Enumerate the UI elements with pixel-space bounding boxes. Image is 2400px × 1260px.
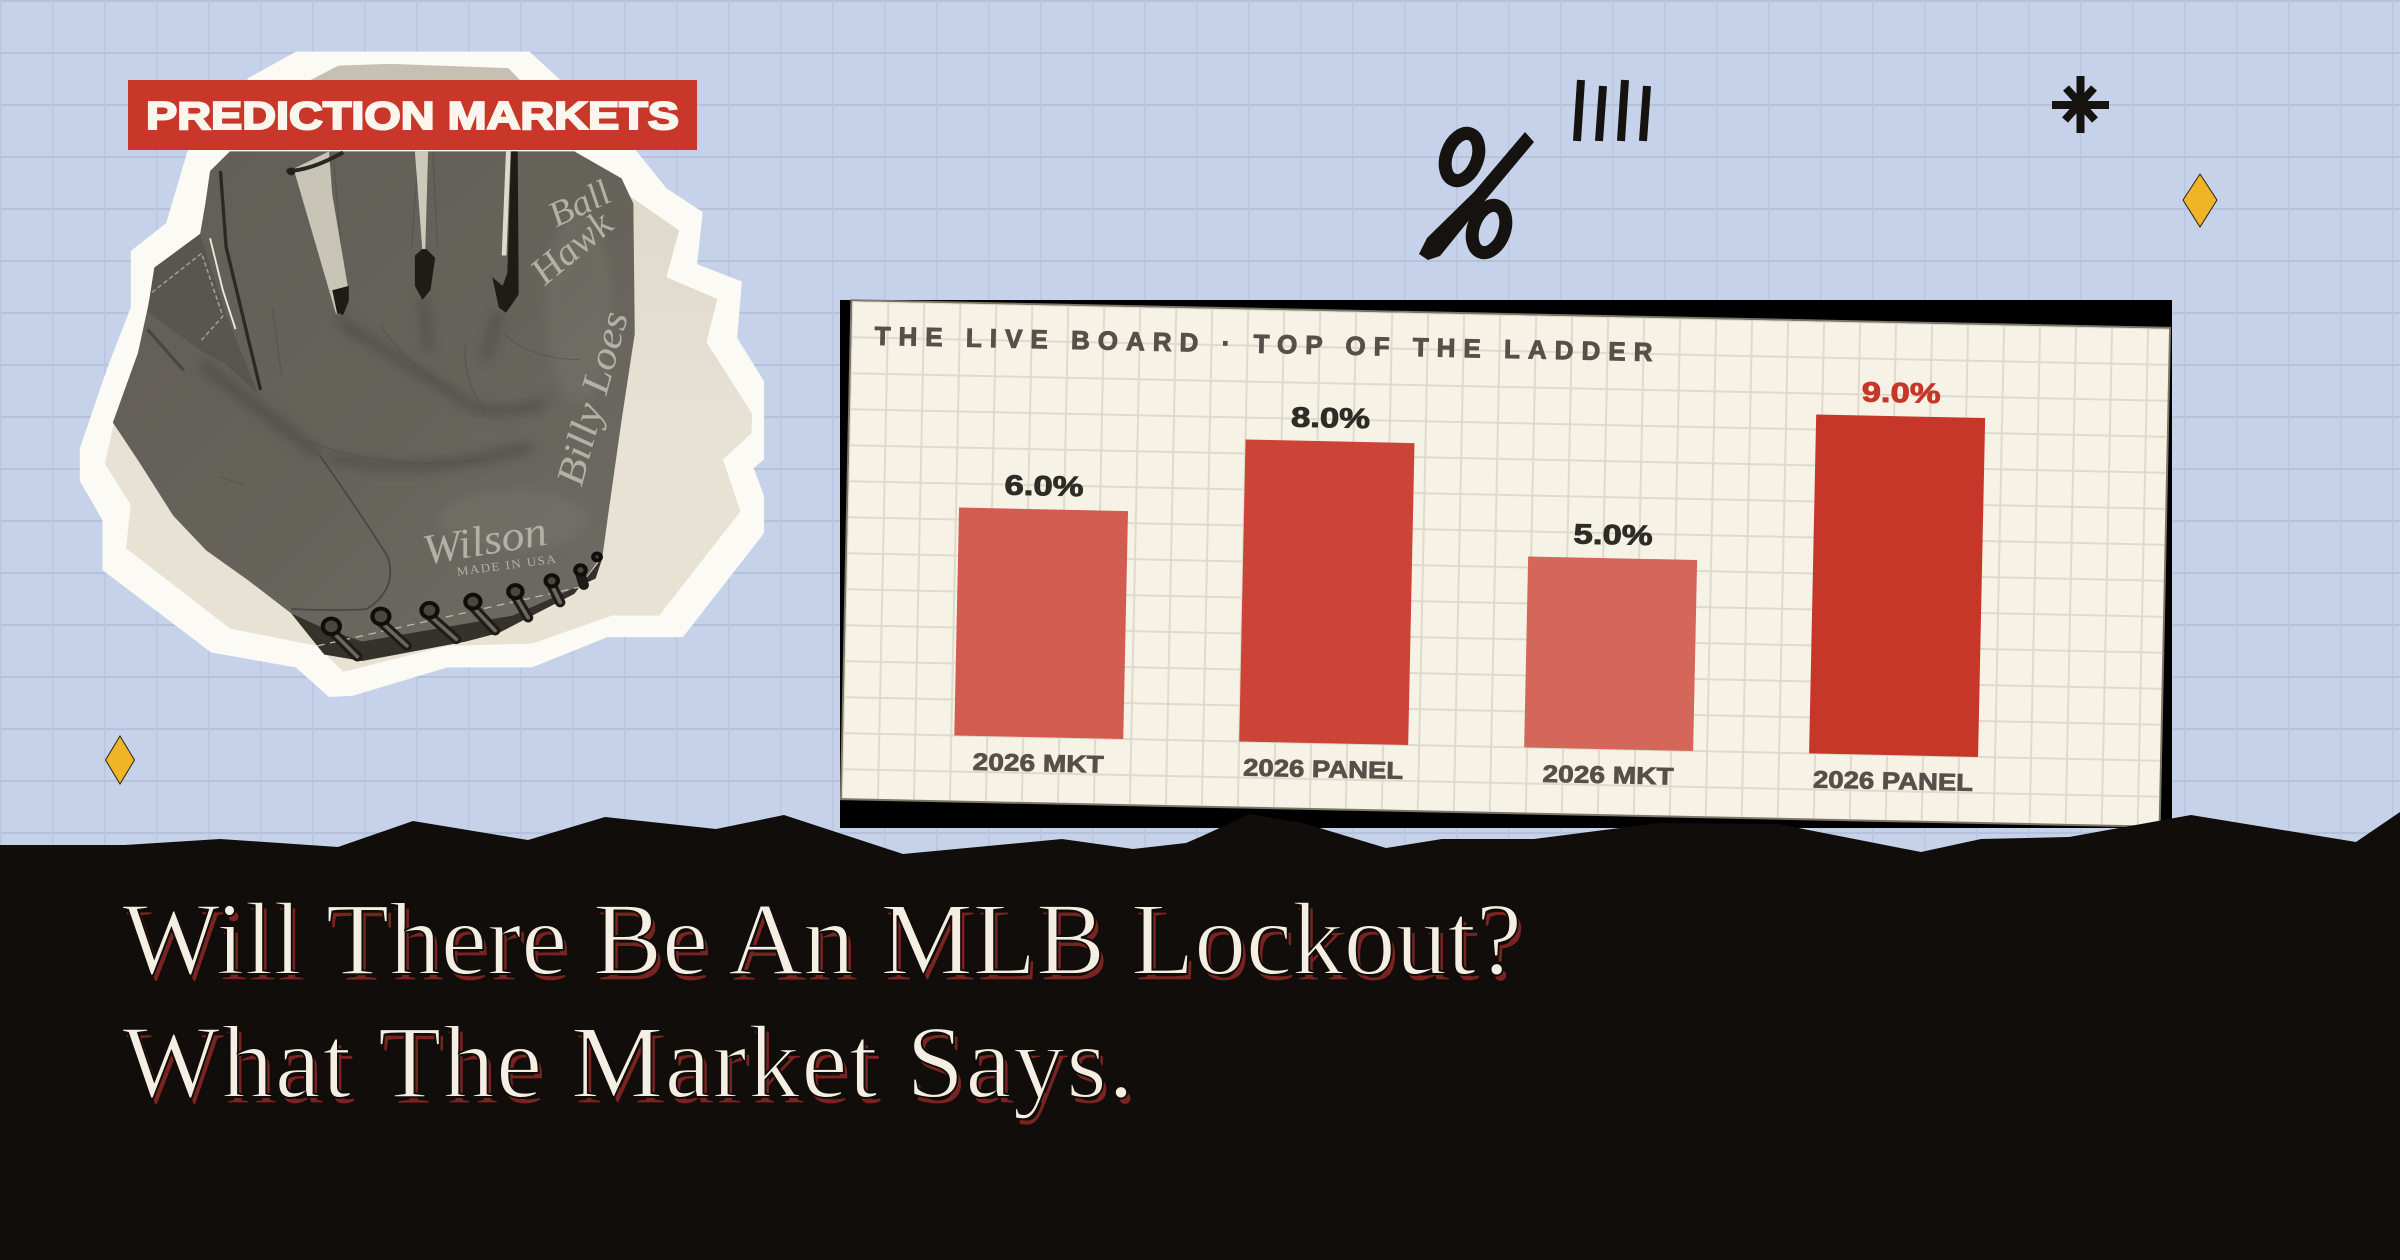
Wilson logo: Wilson	[418, 507, 551, 574]
bar 2: 2026 PANEL 8.0%	[1238, 401, 1415, 785]
category tag	[128, 80, 697, 150]
bar 4: 2026 PANEL 9.0%: 9.0%	[1861, 376, 1941, 409]
chart heading: THE LIVE BOARD · TOP OF THE LADDER	[874, 321, 1653, 367]
bar 2: 2026 PANEL 8.0%: 2026 PANEL	[1243, 755, 1403, 785]
Billy Loes signature: Billy Loes	[548, 307, 637, 490]
Hawk stamp: Hawk	[521, 203, 622, 293]
icon: percent sign	[1419, 129, 1534, 260]
icon: asterisk	[2052, 76, 2109, 133]
glove silhouette	[113, 151, 635, 661]
bar 1: 2026 MKT 6.0%	[953, 469, 1129, 779]
bar 2: 2026 PANEL 8.0%: 8.0%	[1291, 401, 1370, 434]
palm shading	[202, 299, 546, 466]
top sliver of photo background	[310, 64, 520, 80]
bar 3: 2026 MKT 5.0%	[1523, 517, 1698, 791]
bar 4: 2026 PANEL 9.0%: 2026 PANEL	[1813, 766, 1973, 797]
paper card	[841, 300, 2170, 827]
icon: tally marks	[1577, 80, 1647, 141]
torn-paper photo cutout: baseball glove	[80, 52, 764, 697]
bar 4: 2026 PANEL 9.0%	[1808, 375, 1986, 797]
glove stamped lettering	[418, 173, 637, 578]
tag background	[128, 80, 697, 150]
panel: live board bar chart	[841, 300, 2170, 827]
thumb ridge seam	[291, 455, 390, 610]
palm highlight	[438, 212, 612, 550]
bar 1: 2026 MKT 6.0%: 2026 MKT	[972, 749, 1104, 779]
beige photo background	[105, 195, 752, 672]
headline cream text: Will There Be An MLB Lockout?	[122, 882, 1522, 997]
headline red offset shadow	[126, 888, 1526, 1126]
headline cream text	[122, 882, 1522, 1120]
bar 1: 2026 MKT 6.0%: 6.0%	[1004, 469, 1084, 502]
bottom lacing	[291, 553, 603, 661]
icon: yellow diamond left	[106, 736, 134, 784]
bar 3: 2026 MKT 5.0%: 2026 MKT	[1542, 761, 1674, 791]
icon: yellow diamond right	[2183, 174, 2217, 227]
chart screenshot black backing	[840, 300, 2172, 828]
bar 3: 2026 MKT 5.0%: 5.0%	[1573, 518, 1653, 551]
Made in USA: MADE IN USA	[456, 552, 558, 578]
tag text: PREDICTION MARKETS	[146, 95, 679, 138]
Ball stamp: Ball	[541, 173, 618, 235]
finger gaps	[287, 151, 519, 315]
white cutout outline	[80, 52, 764, 697]
torn dark footer band	[0, 812, 2400, 1260]
headline red offset shadow: What The Market Says.	[126, 1011, 1138, 1126]
webbing panel and stitches	[147, 171, 261, 394]
headline cream text: What The Market Says.	[122, 1005, 1134, 1120]
headline red offset shadow: Will There Be An MLB Lockout?	[126, 888, 1526, 1003]
headline	[122, 882, 1526, 1126]
leather creases	[220, 151, 579, 485]
